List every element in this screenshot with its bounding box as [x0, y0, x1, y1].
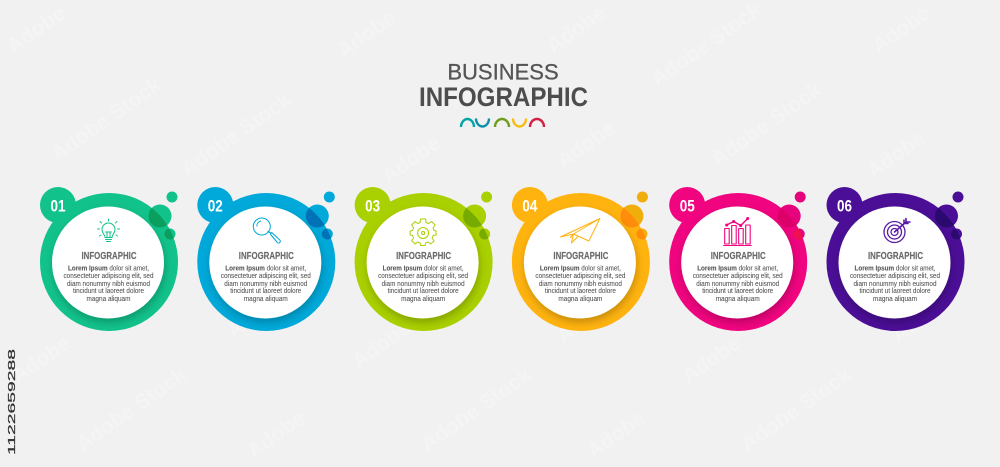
card text: magna aliquam — [86, 296, 131, 303]
number badge 01 — [40, 187, 76, 223]
card text: tincidunt ut laoreet dolore — [388, 288, 459, 295]
icon: magnifier — [253, 218, 280, 243]
card text: INFOGRAPHIC — [553, 251, 608, 262]
number badge 03 — [355, 187, 391, 223]
card text — [693, 251, 783, 303]
card text: magna aliquam — [244, 296, 288, 303]
text: Adobe — [553, 117, 620, 173]
card 02 — [197, 187, 335, 331]
card text: INFOGRAPHIC — [239, 251, 294, 262]
text: Adobe — [348, 317, 415, 373]
text: Adobe Stock — [737, 363, 856, 456]
number badge 04: 04 — [522, 196, 538, 216]
card text: diam nonummy nibh euismod — [224, 281, 307, 288]
card text: magna aliquam — [558, 296, 603, 303]
card text: tincidunt ut laoreet dolore — [545, 288, 616, 295]
card text: tincidunt ut laoreet dolore — [860, 288, 931, 295]
text: Adobe — [583, 407, 650, 463]
card text: diam nonummy nibh euismod — [539, 281, 622, 288]
card text: Lorem Ipsum dolor sit amet, — [68, 266, 149, 272]
card text: magna aliquam — [716, 296, 760, 303]
card text: Lorem Ipsum dolor sit amet, — [697, 266, 778, 272]
icon: target with arrow — [884, 218, 910, 242]
card text: magna aliquam — [873, 296, 917, 303]
card text — [378, 251, 468, 303]
card text: Lorem Ipsum dolor sit amet, — [854, 266, 936, 272]
card text — [64, 251, 154, 303]
card 04 — [512, 187, 650, 331]
text: Adobe Stock — [47, 73, 166, 166]
card text: INFOGRAPHIC — [868, 251, 923, 262]
text: Adobe — [8, 332, 75, 388]
text: Adobe Stock — [707, 78, 826, 171]
title: BUSINESS — [447, 60, 559, 84]
card 05 — [669, 187, 807, 331]
text: Adobe — [868, 2, 935, 58]
number badge 01: 01 — [50, 196, 66, 216]
card text: Lorem Ipsum dolor sit amet, — [383, 266, 464, 272]
card text — [221, 251, 311, 303]
card text: diam nonummy nibh euismod — [382, 281, 465, 288]
card text: tincidunt ut laoreet dolore — [230, 288, 301, 295]
number badge 05 — [669, 187, 705, 223]
card text: magna aliquam — [401, 296, 445, 303]
card text: tincidunt ut laoreet dolore — [702, 288, 773, 295]
number badge 02: 02 — [208, 196, 223, 216]
text: Adobe Stock — [647, 0, 766, 91]
title: INFOGRAPHIC — [419, 82, 588, 112]
card text: consectetuer adipiscing elit, sed — [535, 273, 625, 280]
card text: INFOGRAPHIC — [711, 251, 766, 262]
stock image id: 1122659288 — [6, 349, 18, 455]
text: Adobe — [378, 132, 445, 188]
decorative wave arcs — [461, 118, 544, 127]
card text: diam nonummy nibh euismod — [696, 281, 779, 288]
card text: diam nonummy nibh euismod — [854, 281, 937, 288]
card text: consectetuer adipiscing elit, sed — [850, 273, 940, 280]
card text: consectetuer adipiscing elit, sed — [64, 273, 154, 280]
card text: diam nonummy nibh euismod — [67, 281, 150, 288]
card text: consectetuer adipiscing elit, sed — [693, 273, 783, 280]
card text: INFOGRAPHIC — [396, 251, 451, 262]
card text: tincidunt ut laoreet dolore — [73, 288, 144, 295]
card 01 — [40, 187, 178, 331]
icon: bar chart — [724, 218, 751, 246]
card text: consectetuer adipiscing elit, sed — [378, 273, 468, 280]
icon: light bulb — [98, 219, 120, 242]
number badge 02 — [197, 187, 233, 223]
card 03 — [355, 187, 493, 331]
text: Adobe — [888, 292, 955, 348]
card text: Lorem Ipsum dolor sit amet, — [540, 266, 621, 272]
card text: Lorem Ipsum dolor sit amet, — [225, 266, 306, 272]
text: Adobe Stock — [417, 363, 536, 456]
title — [419, 60, 588, 112]
card text: consectetuer adipiscing elit, sed — [221, 273, 311, 280]
text: Adobe — [3, 2, 70, 58]
card text — [535, 251, 625, 303]
text: Adobe — [333, 7, 400, 63]
card 06 — [826, 187, 964, 331]
number badge 03: 03 — [365, 196, 380, 216]
text: Adobe Stock — [72, 363, 191, 456]
text: Adobe — [243, 407, 310, 463]
number badge 05: 05 — [680, 196, 695, 216]
text: Adobe Stock — [177, 88, 296, 181]
number badge 04 — [512, 187, 548, 223]
text: Adobe — [863, 127, 930, 183]
card text — [850, 251, 940, 303]
text: Adobe — [553, 292, 620, 348]
text: Adobe — [543, 2, 610, 58]
icon: paper plane — [560, 218, 600, 243]
number badge 06 — [826, 187, 862, 223]
text: Adobe — [678, 332, 745, 388]
icon: gear — [410, 219, 436, 246]
card text: INFOGRAPHIC — [82, 251, 136, 262]
number badge 06: 06 — [837, 196, 852, 216]
text: Adobe — [223, 287, 290, 343]
